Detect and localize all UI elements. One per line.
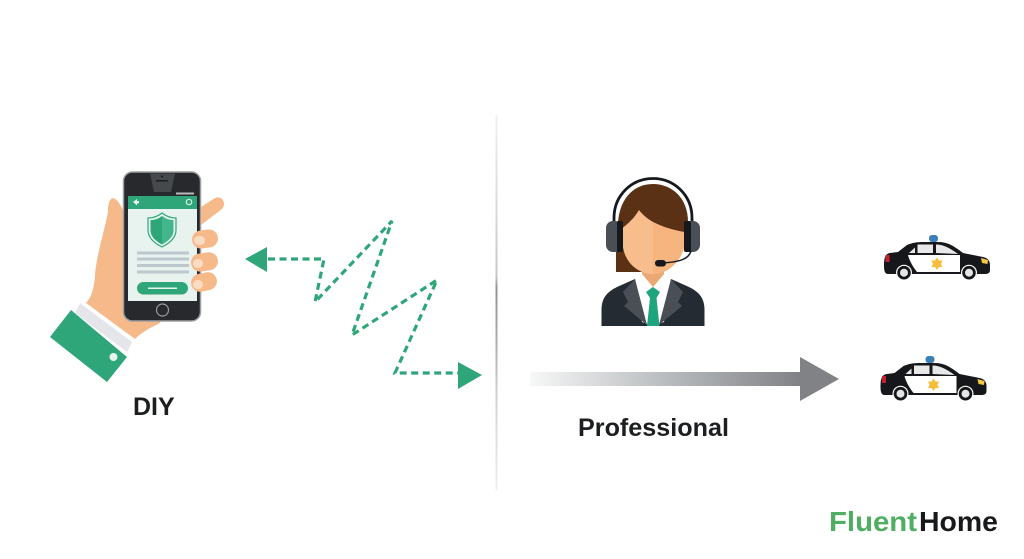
arrowhead left xyxy=(245,247,267,272)
hand palm xyxy=(86,198,170,339)
lights xyxy=(978,379,984,385)
white shirt xyxy=(635,274,671,326)
text lines xyxy=(137,252,189,274)
windows xyxy=(909,248,915,253)
left earcup xyxy=(606,221,622,252)
suit xyxy=(602,279,704,326)
dashed zigzag double arrow xyxy=(245,221,482,389)
shirt cuff xyxy=(75,303,132,352)
shield icon xyxy=(148,213,176,247)
logo: FluentHome: Home xyxy=(919,506,998,537)
microphone xyxy=(662,251,691,263)
sleeve button xyxy=(110,353,118,361)
face xyxy=(622,210,684,274)
thumb and fingers xyxy=(201,197,224,225)
green sleeve xyxy=(50,310,127,382)
label: Professional: Professional xyxy=(578,414,729,442)
divider line xyxy=(496,115,498,490)
gradient arrow xyxy=(530,357,839,401)
app header bar xyxy=(128,196,197,209)
wheels xyxy=(896,265,912,281)
windows xyxy=(906,368,912,374)
icon: call centre agent with headset xyxy=(602,178,704,326)
lights xyxy=(981,258,988,264)
arrowhead right xyxy=(458,362,482,389)
neck xyxy=(642,262,664,288)
white door panel xyxy=(908,255,960,272)
hair xyxy=(616,184,688,272)
icon: police car bottom xyxy=(880,356,986,402)
roof light xyxy=(926,356,934,363)
status icons xyxy=(176,192,194,194)
star badge xyxy=(928,378,939,391)
logo: FluentHome: Fluent xyxy=(829,506,917,537)
star badge xyxy=(932,258,942,270)
logo: FluentHome xyxy=(829,506,998,537)
right earcup xyxy=(684,221,700,252)
app button xyxy=(137,282,188,294)
phone screen xyxy=(128,196,197,301)
green tie xyxy=(646,287,660,326)
label: DIY: DIY xyxy=(133,393,175,421)
car body xyxy=(880,363,986,395)
phone top speaker area xyxy=(150,174,175,192)
white door panel xyxy=(904,376,956,393)
back arrow xyxy=(133,199,139,206)
settings icon xyxy=(186,199,192,205)
phone body xyxy=(124,172,200,321)
roof light xyxy=(929,235,938,242)
lapels xyxy=(623,279,647,325)
wheels xyxy=(892,386,908,402)
icon: hand holding phone xyxy=(50,172,224,382)
car body xyxy=(884,242,990,274)
headband xyxy=(614,178,692,224)
home button xyxy=(156,304,168,316)
icon: police car top xyxy=(884,235,990,281)
